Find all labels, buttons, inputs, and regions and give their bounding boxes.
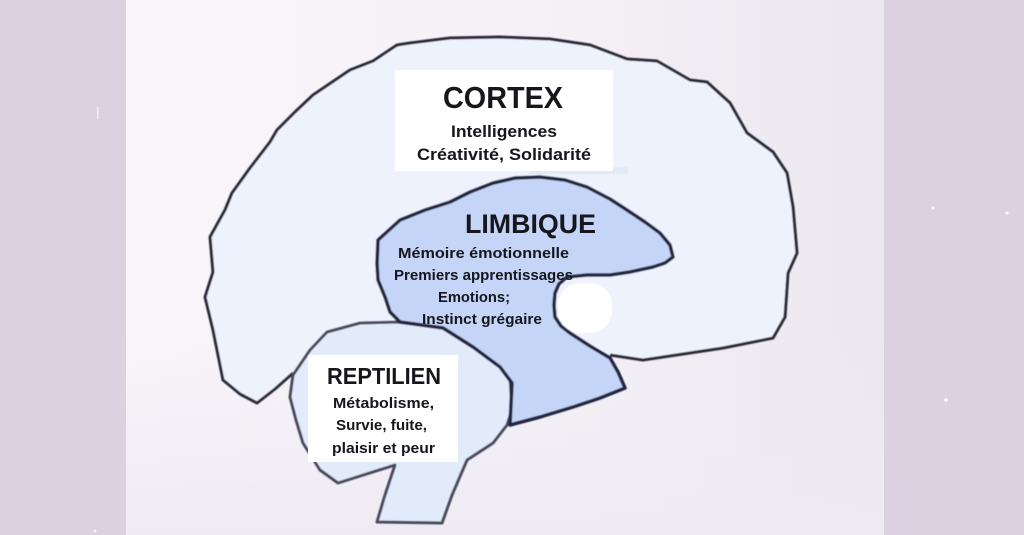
- reptilian region with brain stem: [290, 322, 512, 523]
- text: first learnings: Premiers apprentissages: [394, 267, 573, 284]
- brain diagram regions: [205, 37, 797, 523]
- cortex label box: [395, 70, 613, 171]
- pale strip under cortex box: [529, 167, 628, 174]
- text: survival, flight: Survie, fuite,: [336, 417, 427, 434]
- text: emotional memory: Mémoire émotionnelle: [398, 245, 569, 262]
- text: pleasure and fear: plaisir et peur: [332, 440, 435, 457]
- text: creativity and solidarity: Créativité, Solidarité: [417, 145, 591, 164]
- limbic label: [394, 209, 596, 328]
- text: metabolism: Métabolisme,: [333, 395, 434, 412]
- text: emotions: Emotions;: [438, 289, 510, 306]
- heading: reptilien: REPTILIEN: [327, 363, 441, 389]
- white hole: [558, 283, 612, 333]
- heading: limbique: LIMBIQUE: [465, 209, 596, 239]
- text: intelligences: Intelligences: [451, 122, 557, 141]
- reptilian label box: [308, 355, 458, 462]
- specks on side bands: [94, 107, 1008, 532]
- central background panel: [126, 0, 884, 535]
- cortex region: [205, 37, 797, 403]
- heading: cortex: CORTEX: [443, 80, 563, 115]
- limbic region: [377, 177, 673, 425]
- text: gregarious instinct: Instinct grégaire: [422, 311, 542, 328]
